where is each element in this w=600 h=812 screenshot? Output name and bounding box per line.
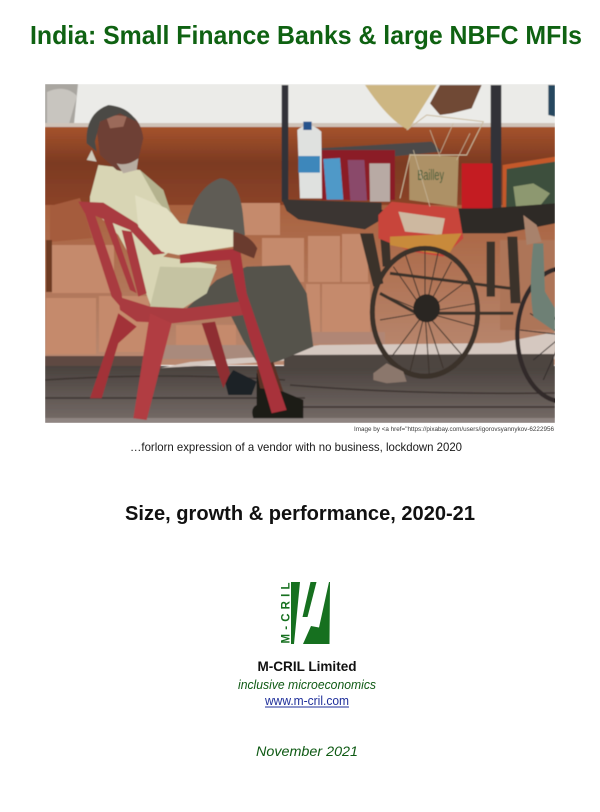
vendor cart: frame, wares, wheels xyxy=(281,84,555,404)
man's trousers and shoes xyxy=(187,178,313,418)
vendor cart: frame, wares, wheels: Bailley xyxy=(417,168,444,184)
organisation name: M-CRIL Limited xyxy=(258,658,356,674)
far wheel xyxy=(514,266,555,404)
photo caption: …forlorn expression of a vendor with no business, lockdown 2020 xyxy=(130,440,462,454)
red plastic chair xyxy=(78,202,287,420)
M-CRIL logo xyxy=(280,582,330,644)
photo: vendor seated beside his cart xyxy=(45,84,600,423)
subtitle: Size, growth & performance, 2020-21 xyxy=(125,503,475,525)
man's sleeve and hands xyxy=(135,195,257,258)
near wheel xyxy=(372,248,513,376)
title: India: Small Finance Banks & large NBFC MFIs xyxy=(30,20,582,50)
image credit: Image by <a href="https://pixabay.com/users/igorovsyannykov-6222956 xyxy=(354,426,555,433)
wall: plaster, red band, stone blocks xyxy=(45,84,555,368)
pavement xyxy=(45,333,565,423)
man's shirt body and head xyxy=(87,105,217,310)
tagline: inclusive microeconomics xyxy=(238,678,376,692)
M-CRIL logo: M-CRIL xyxy=(280,582,292,644)
website link: www.m-cril.com xyxy=(264,694,349,708)
date: November 2021 xyxy=(256,743,358,759)
